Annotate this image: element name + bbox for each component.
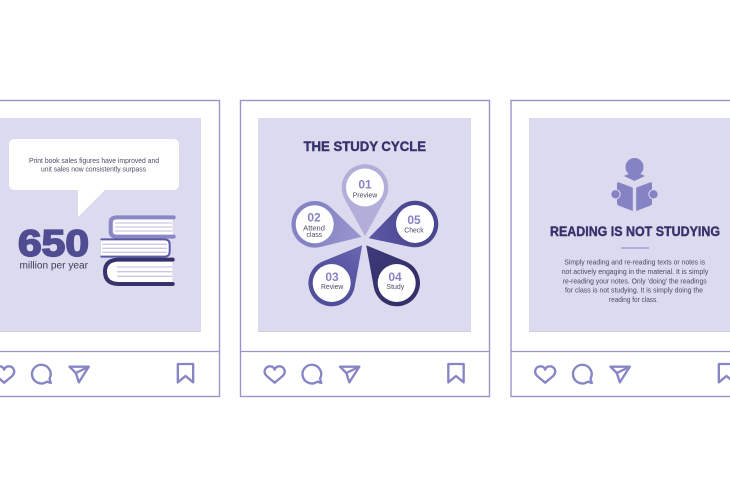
step 03 review bbox=[299, 231, 380, 316]
step 03 review: Review bbox=[321, 282, 344, 291]
bubble text: Print book sales figures have improved and bbox=[29, 156, 159, 165]
post 3 image background bbox=[529, 118, 730, 331]
post 1 image background bbox=[0, 118, 201, 331]
post 2 frame bbox=[240, 100, 490, 396]
post 2 image background bbox=[258, 118, 471, 331]
step 02 attend class: class bbox=[306, 230, 322, 239]
step 02 attend class: Attend bbox=[303, 223, 325, 232]
panel: post 1 book sales bbox=[0, 100, 220, 396]
heading: reading is not studying: READING IS NOT STUDYING bbox=[550, 224, 720, 239]
post 1 frame bbox=[0, 100, 220, 396]
step 01 preview: 01 bbox=[358, 178, 372, 192]
step 05 check: 05 bbox=[407, 213, 421, 227]
speech bubble bbox=[9, 139, 179, 217]
step 01 preview bbox=[342, 164, 388, 236]
body text bbox=[562, 258, 709, 304]
icon: person reading bbox=[611, 158, 658, 211]
heading: the study cycle: THE STUDY CYCLE bbox=[304, 139, 426, 154]
bubble text: unit sales now consistently surpass bbox=[41, 164, 146, 174]
body text: reading for class. bbox=[609, 295, 658, 304]
icon row post 2 bbox=[265, 364, 464, 383]
step 05 check: Check bbox=[404, 226, 424, 235]
step 04 study: 04 bbox=[388, 270, 402, 284]
divider bbox=[621, 247, 649, 249]
step 02 attend class: 02 bbox=[307, 210, 321, 224]
body text: for class is not studying. It is simply doing the bbox=[565, 286, 703, 295]
step 04 study bbox=[348, 231, 429, 316]
step 01 preview: Preview bbox=[353, 191, 378, 200]
step 05 check bbox=[362, 195, 444, 260]
body text: Simply reading and re-reading texts or notes is bbox=[564, 258, 705, 266]
million per year label: million per year bbox=[20, 260, 89, 272]
panel: post 3 reading is not studying bbox=[511, 100, 730, 396]
step 04 study: Study bbox=[386, 282, 404, 291]
body text: re-reading your notes. Only ‘doing’ the readings bbox=[563, 276, 707, 285]
post 3 frame bbox=[511, 100, 730, 396]
icon row post 1 bbox=[0, 364, 193, 383]
icon: stack of books bbox=[101, 217, 174, 284]
bubble text bbox=[29, 156, 159, 174]
panel: post 2 study cycle bbox=[240, 100, 490, 396]
body text: not actively engaging in the material. It is simply bbox=[562, 267, 709, 276]
big number 650: 650 bbox=[18, 223, 89, 264]
step 03 review: 03 bbox=[325, 270, 339, 284]
icon row post 3 bbox=[535, 364, 730, 383]
step 02 attend class bbox=[286, 196, 368, 259]
